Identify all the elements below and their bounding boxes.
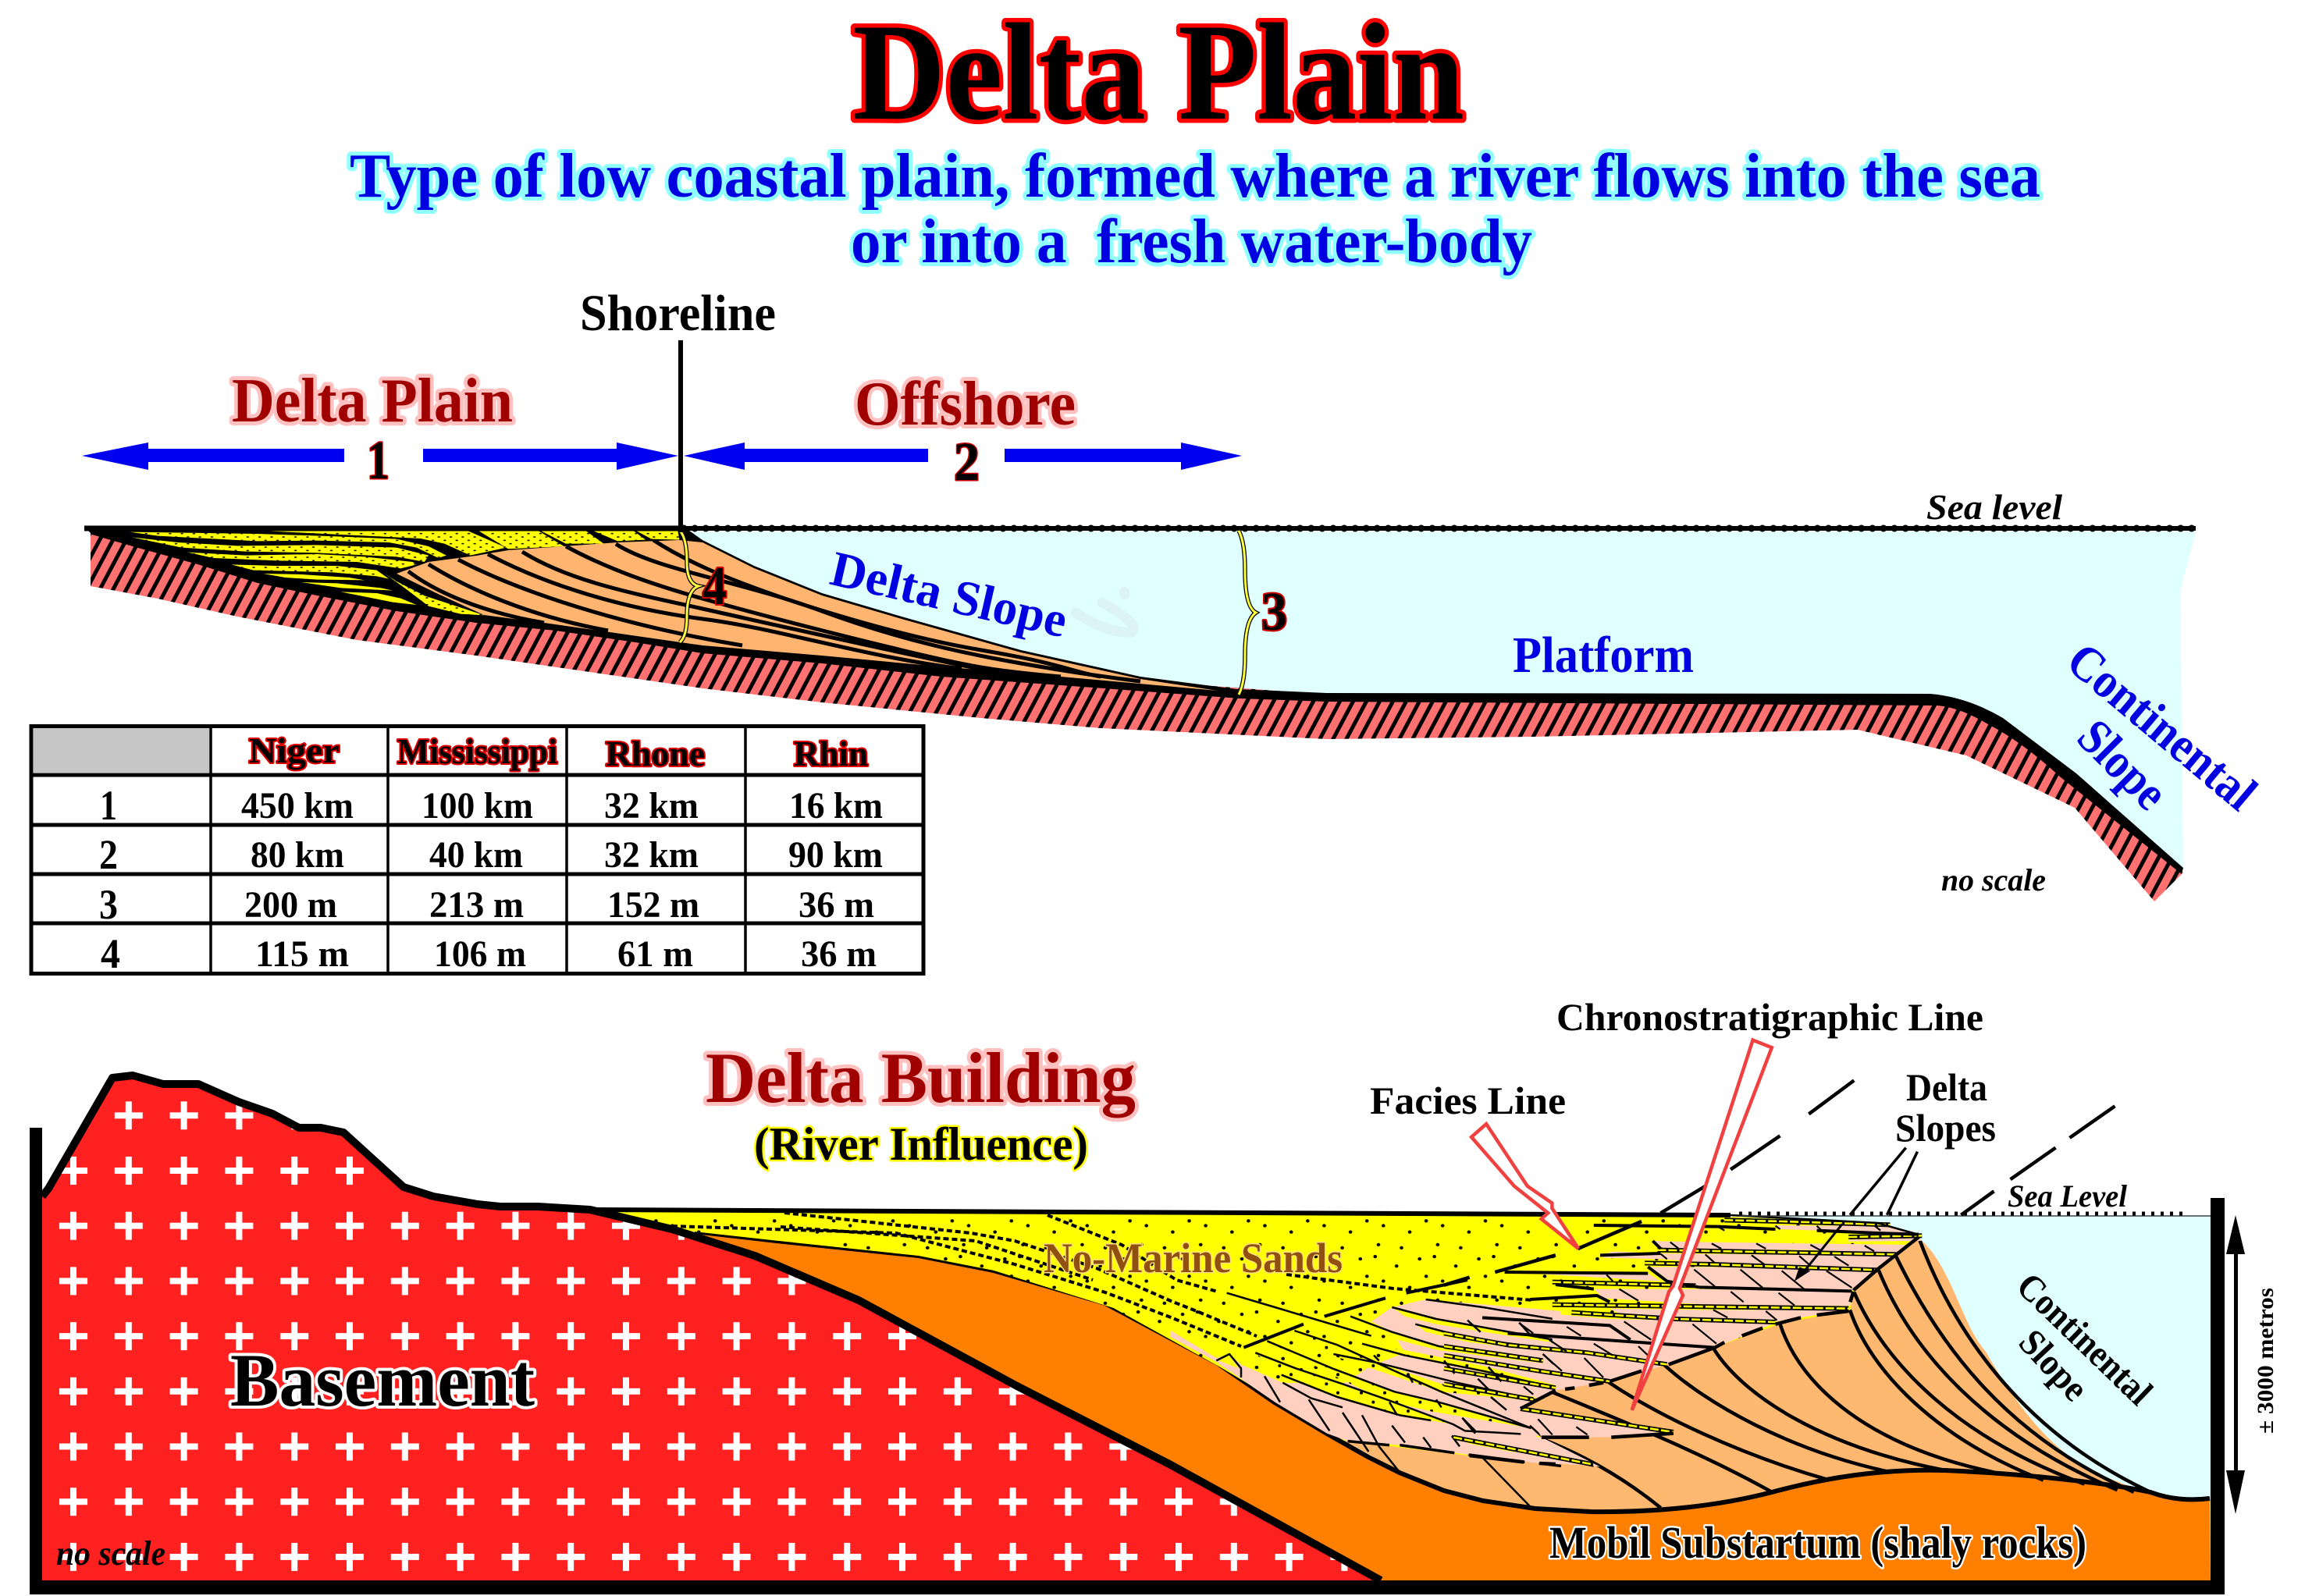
strip dashes <box>1444 1220 1922 1465</box>
table row 3: 200 m <box>244 884 337 926</box>
delta slopes label: Delta <box>1906 1065 1987 1109</box>
delta foreset body <box>1344 1239 2150 1514</box>
panel: delta profile <box>84 527 2196 901</box>
table row 4: 115 m <box>255 933 349 975</box>
number 2: 2 <box>954 432 980 492</box>
sea level dotted line <box>1739 1214 2211 1216</box>
surface line <box>590 1210 1731 1215</box>
number 3: 3 <box>1261 582 1287 642</box>
table row 4 <box>101 930 877 977</box>
table row 1: 450 km <box>241 785 354 826</box>
pink fan base <box>1171 1299 1561 1466</box>
seabed black band <box>84 527 2183 874</box>
sea water <box>684 531 2196 869</box>
basement label: Basement <box>230 1338 535 1422</box>
substratum top line <box>695 1232 2210 1512</box>
clinoform curves <box>1542 1241 2150 1508</box>
table row 1 <box>100 782 883 829</box>
table headers: Niger <box>249 730 340 770</box>
yellow fingers <box>1255 1307 1561 1460</box>
offshore heading: Offshore <box>855 370 1076 439</box>
yellow sands and clinoform curves <box>590 1210 2150 1508</box>
table headers: Mississippi <box>397 731 557 771</box>
pointer: facies line <box>1471 1124 1578 1249</box>
bracket 3 <box>1239 531 1256 695</box>
sand wedge yellow ribbons <box>130 528 679 615</box>
table row 2: 32 km <box>604 834 699 876</box>
delta slopes label: Slopes <box>1895 1106 1996 1150</box>
delta top thin line <box>1731 1215 1919 1235</box>
arrow: extent 1 <box>82 443 678 470</box>
delta slope pointer arrow <box>1795 1224 1842 1281</box>
thickness label: ± 3000 metros <box>2253 1288 2278 1434</box>
table row 1: 1 <box>100 782 117 829</box>
table row 3: 152 m <box>607 884 699 926</box>
facies line dashes <box>1243 1280 1467 1348</box>
basement <box>42 1075 1381 1580</box>
mobil substratum label: Mobil Substartum (shaly rocks) <box>1549 1517 2086 1568</box>
continental slope label lower: Slope <box>2011 1321 2097 1409</box>
arrow: extent 2 <box>684 443 1242 470</box>
table grid <box>30 724 925 975</box>
chronostratigraphic line label: Chronostratigraphic Line <box>1556 995 1983 1039</box>
pointer: chronostratigraphic line <box>1632 1040 1772 1410</box>
faint watermark <box>1076 592 1133 632</box>
data table <box>30 724 925 977</box>
shoreline label: Shoreline <box>580 285 776 342</box>
sand stipple <box>590 1210 1920 1456</box>
delta slopes label <box>1895 1065 1996 1150</box>
bold bedding lines <box>1482 1225 1919 1348</box>
continental slope label: Continental <box>2057 631 2268 821</box>
table row 2: 2 <box>99 831 118 878</box>
bedding lines <box>1216 1293 1561 1506</box>
short hatch ticks <box>1489 1225 1880 1434</box>
frame <box>30 1128 2225 1594</box>
table row 3: 36 m <box>799 884 874 926</box>
delta slope label: Delta Slope <box>826 540 1072 648</box>
fan of clinoform beds <box>1171 1280 1561 1506</box>
table row 1: 16 km <box>789 785 883 826</box>
panel: delta building cross section <box>30 1075 2225 1594</box>
substrate hatch <box>91 531 2183 901</box>
upper clinoform rows <box>1444 1220 1922 1466</box>
table header swatch <box>34 728 209 773</box>
heading: delta building: Delta Building <box>706 1038 1136 1118</box>
subtitle: Type of low coastal plain, formed where a river flows into the sea <box>350 142 2040 211</box>
number 4: 4 <box>703 556 727 617</box>
mobile substratum orange <box>695 1232 2211 1580</box>
no scale label: no scale <box>1941 862 2046 898</box>
shelf edge and facies boundary <box>1521 1237 1919 1409</box>
table row 1: 32 km <box>604 785 699 826</box>
table row 4: 36 m <box>801 933 877 975</box>
small wedge at fan toe <box>1219 1355 1239 1368</box>
thickness arrow <box>2226 1215 2245 1514</box>
table row 2 <box>99 831 883 878</box>
delta slopes leaders <box>1850 1148 1917 1215</box>
delta plain heading: Delta Plain <box>232 367 513 435</box>
prodelta wedge orange <box>397 540 1218 691</box>
table row 4: 4 <box>101 930 120 977</box>
subtitle: or into a fresh water-body <box>851 208 1532 276</box>
leaders and pointers <box>1471 1040 2115 1410</box>
continental slope label lower: Continental <box>2008 1265 2161 1413</box>
finger stipple <box>1255 1331 1556 1428</box>
table row 4: 61 m <box>617 933 693 975</box>
table row 2: 90 km <box>788 834 883 876</box>
table headers <box>249 730 868 773</box>
shoreline line <box>678 340 683 532</box>
dashed facies boundary <box>1348 1441 1561 1466</box>
table headers: Rhin <box>794 734 868 773</box>
facies line label: Facies Line <box>1370 1079 1566 1122</box>
yellow sands <box>590 1210 1920 1466</box>
no-marine sands label: No-Marine Sands <box>1044 1235 1343 1281</box>
sea level label lower: Sea Level <box>2008 1178 2128 1214</box>
sea level line <box>84 526 2196 531</box>
continental slope label: Slope <box>2067 709 2179 820</box>
pink rows <box>1505 1225 1922 1466</box>
table row 4: 106 m <box>434 933 526 975</box>
sea level label: Sea level <box>1926 487 2062 527</box>
table row 3 <box>99 881 874 928</box>
table headers: Rhone <box>606 734 705 773</box>
dashed lines in sands <box>672 1213 1533 1346</box>
table row 2: 40 km <box>429 834 523 876</box>
ocean water <box>1739 1215 2211 1502</box>
table row 3: 3 <box>99 881 118 928</box>
no scale label lower: no scale <box>56 1534 165 1573</box>
number 1: 1 <box>367 431 390 491</box>
chronostratigraphic dashes <box>1661 1080 2115 1215</box>
lower orange tongue dashes <box>1470 1434 1674 1464</box>
bracket 4 <box>680 531 699 642</box>
platform label: Platform <box>1513 627 1694 684</box>
facies line dashes upper <box>1444 1221 1642 1285</box>
yellow dashed strips <box>1444 1220 1922 1465</box>
table row 2: 80 km <box>251 834 344 876</box>
table row 3: 213 m <box>429 884 524 926</box>
subtitle <box>350 142 2040 276</box>
table row 1: 100 km <box>422 785 533 826</box>
subheading: river influence: (River Influence) <box>754 1118 1088 1170</box>
